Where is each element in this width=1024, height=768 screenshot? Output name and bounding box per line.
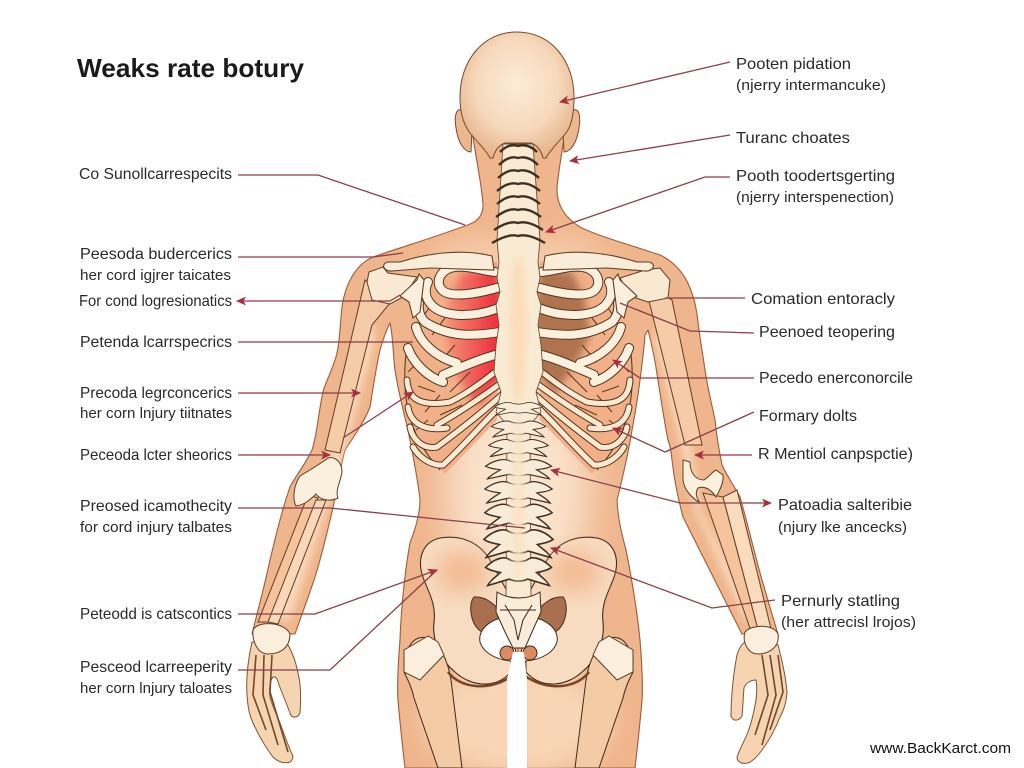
title: Weaks rate botury [77, 53, 305, 83]
label: Patoadia salteribie [551, 470, 912, 536]
right side shade [530, 268, 590, 395]
label: Peceoda lcter sheorics: Peceoda lcter sheorics [80, 447, 232, 464]
label: For cond logresionatics [79, 293, 400, 310]
label: Peesoda budercerics: Peesoda budercerics [80, 246, 232, 263]
label: Peesoda budercerics [80, 246, 403, 284]
label: Pecedo enerconorcile [613, 360, 913, 387]
label: Peenoed teopering: Peenoed teopering [759, 324, 895, 341]
left arm bones [247, 267, 417, 763]
head and ears [455, 32, 580, 158]
label: Formary dolts: Formary dolts [759, 408, 857, 425]
neck vertebrae [492, 145, 545, 243]
lower vertebrae [484, 402, 553, 586]
label: Petenda lcarrspecrics: Petenda lcarrspecrics [80, 334, 232, 351]
rib cage [403, 262, 634, 474]
clavicles and scapulae [384, 252, 653, 318]
label: Pooth toodertsgerting: Pooth toodertsgerting [736, 168, 895, 185]
label: Formary dolts [613, 408, 857, 452]
label: Preosed icamothecity: Preosed icamothecity [80, 498, 232, 515]
label: Turanc choates [570, 130, 850, 161]
label: Pernurly statling [551, 548, 916, 631]
label: Pooten pidation: (njerry intermancuke) [736, 77, 886, 94]
label: Preosed icamothecity: for cord injury talbates [80, 519, 232, 536]
body silhouette [252, 130, 778, 768]
label: Peesoda budercerics: her cord igjrer taicates [80, 267, 231, 284]
label: Co Sunollcarrespecits: Co Sunollcarrespecits [79, 166, 232, 183]
pelvis [404, 537, 633, 768]
website credit: www.BackKarct.com [869, 740, 1011, 757]
label: Pecedo enerconorcile: Pecedo enerconorcile [759, 370, 913, 387]
label: Precoda legrconcerics [80, 385, 360, 422]
spine [484, 144, 553, 648]
label: Peteodd is catscontics [80, 570, 437, 623]
label: Peenoed teopering [620, 303, 895, 341]
soft shading on back and limbs [275, 237, 760, 768]
label: Pooten pidation [560, 56, 886, 102]
label: Co Sunollcarrespecits [79, 166, 465, 225]
right arm bones [620, 268, 787, 763]
label: Comation entoracly: Comation entoracly [751, 291, 895, 308]
label: R Mentiol canpspctie): R Mentiol canpspctie) [758, 446, 913, 463]
leg gap [507, 652, 527, 768]
label: Pooten pidation: Pooten pidation [736, 56, 851, 73]
label: Patoadia salteribie: Patoadia salteribie [778, 497, 912, 514]
label: Precoda legrconcerics: her corn lnjury tiitnates [80, 405, 232, 422]
right ribs [529, 267, 632, 470]
label: Peteodd is catscontics: Peteodd is catscontics [80, 606, 232, 623]
label: For cond logresionatics: For cond logresionatics [79, 293, 232, 310]
injury highlight [445, 268, 510, 405]
label: Pooth toodertsgerting [546, 168, 895, 232]
left ribs [405, 267, 508, 470]
label: Peceoda lcter sheorics [80, 392, 413, 464]
label: Pernurly statling: Pernurly statling [781, 593, 900, 610]
label: Precoda legrconcerics: Precoda legrconcerics [80, 385, 232, 402]
sacrum [496, 592, 541, 648]
label: Pooth toodertsgerting: (njerry interspenection) [736, 189, 894, 206]
label: Pesceod lcarreeperity: her corn lnjury taloates [80, 680, 232, 697]
label: Pernurly statling: (her attrecisl lrojos) [781, 614, 916, 631]
label: Pesceod lcarreeperity: Pesceod lcarreeperity [80, 659, 232, 676]
label: Pesceod lcarreeperity [80, 570, 437, 697]
label: Turanc choates: Turanc choates [736, 130, 850, 147]
label: Preosed icamothecity [80, 498, 525, 536]
label: Patoadia salteribie: (njury lke ancecks) [778, 519, 907, 536]
